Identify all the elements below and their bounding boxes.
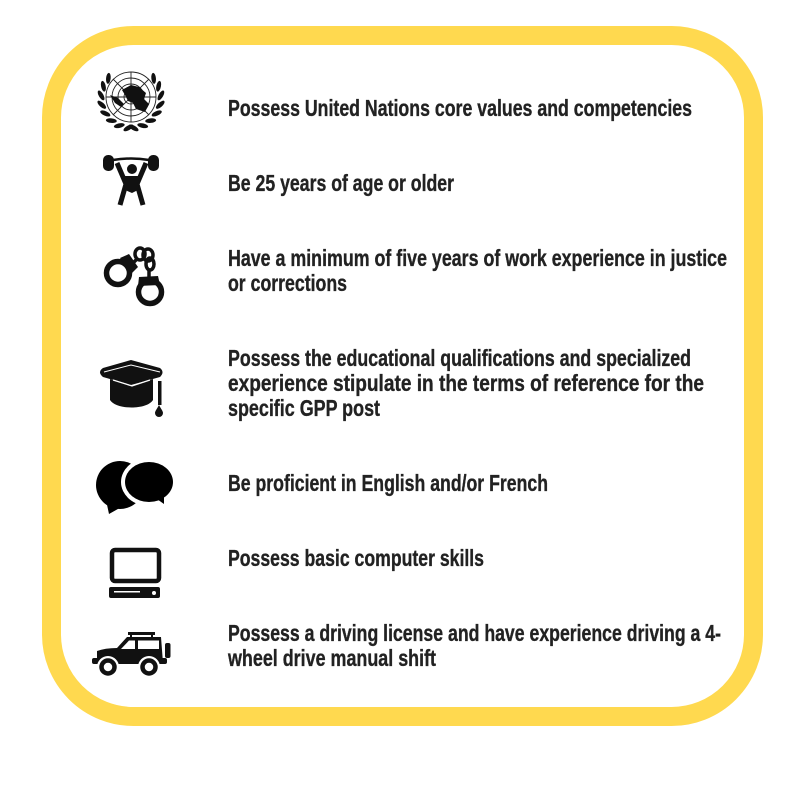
text: driving: wheel drive manual shift <box>227 645 436 671</box>
text: education: specific GPP post <box>228 395 380 421</box>
icon: graduation cap <box>100 360 163 417</box>
text: languages: Be proficient in English and/or French <box>228 470 548 496</box>
text: work experience: or corrections <box>228 270 347 296</box>
text: age: Be 25 years of age or older <box>228 170 454 196</box>
icon: handcuffs <box>106 248 162 304</box>
text: education <box>228 345 704 421</box>
icon: jeep <box>92 632 170 678</box>
text: computer skills: Possess basic computer skills <box>228 545 484 571</box>
icon: weightlifter <box>103 155 159 205</box>
panel: yellow rounded frame <box>52 36 754 716</box>
icon: speech bubbles <box>96 458 177 514</box>
icon: United Nations emblem <box>96 72 166 133</box>
text: education: experience stipulate in the terms of reference for the <box>228 370 704 396</box>
text: work experience <box>228 245 727 296</box>
icon: computer <box>109 550 160 598</box>
text: driving <box>227 620 721 671</box>
